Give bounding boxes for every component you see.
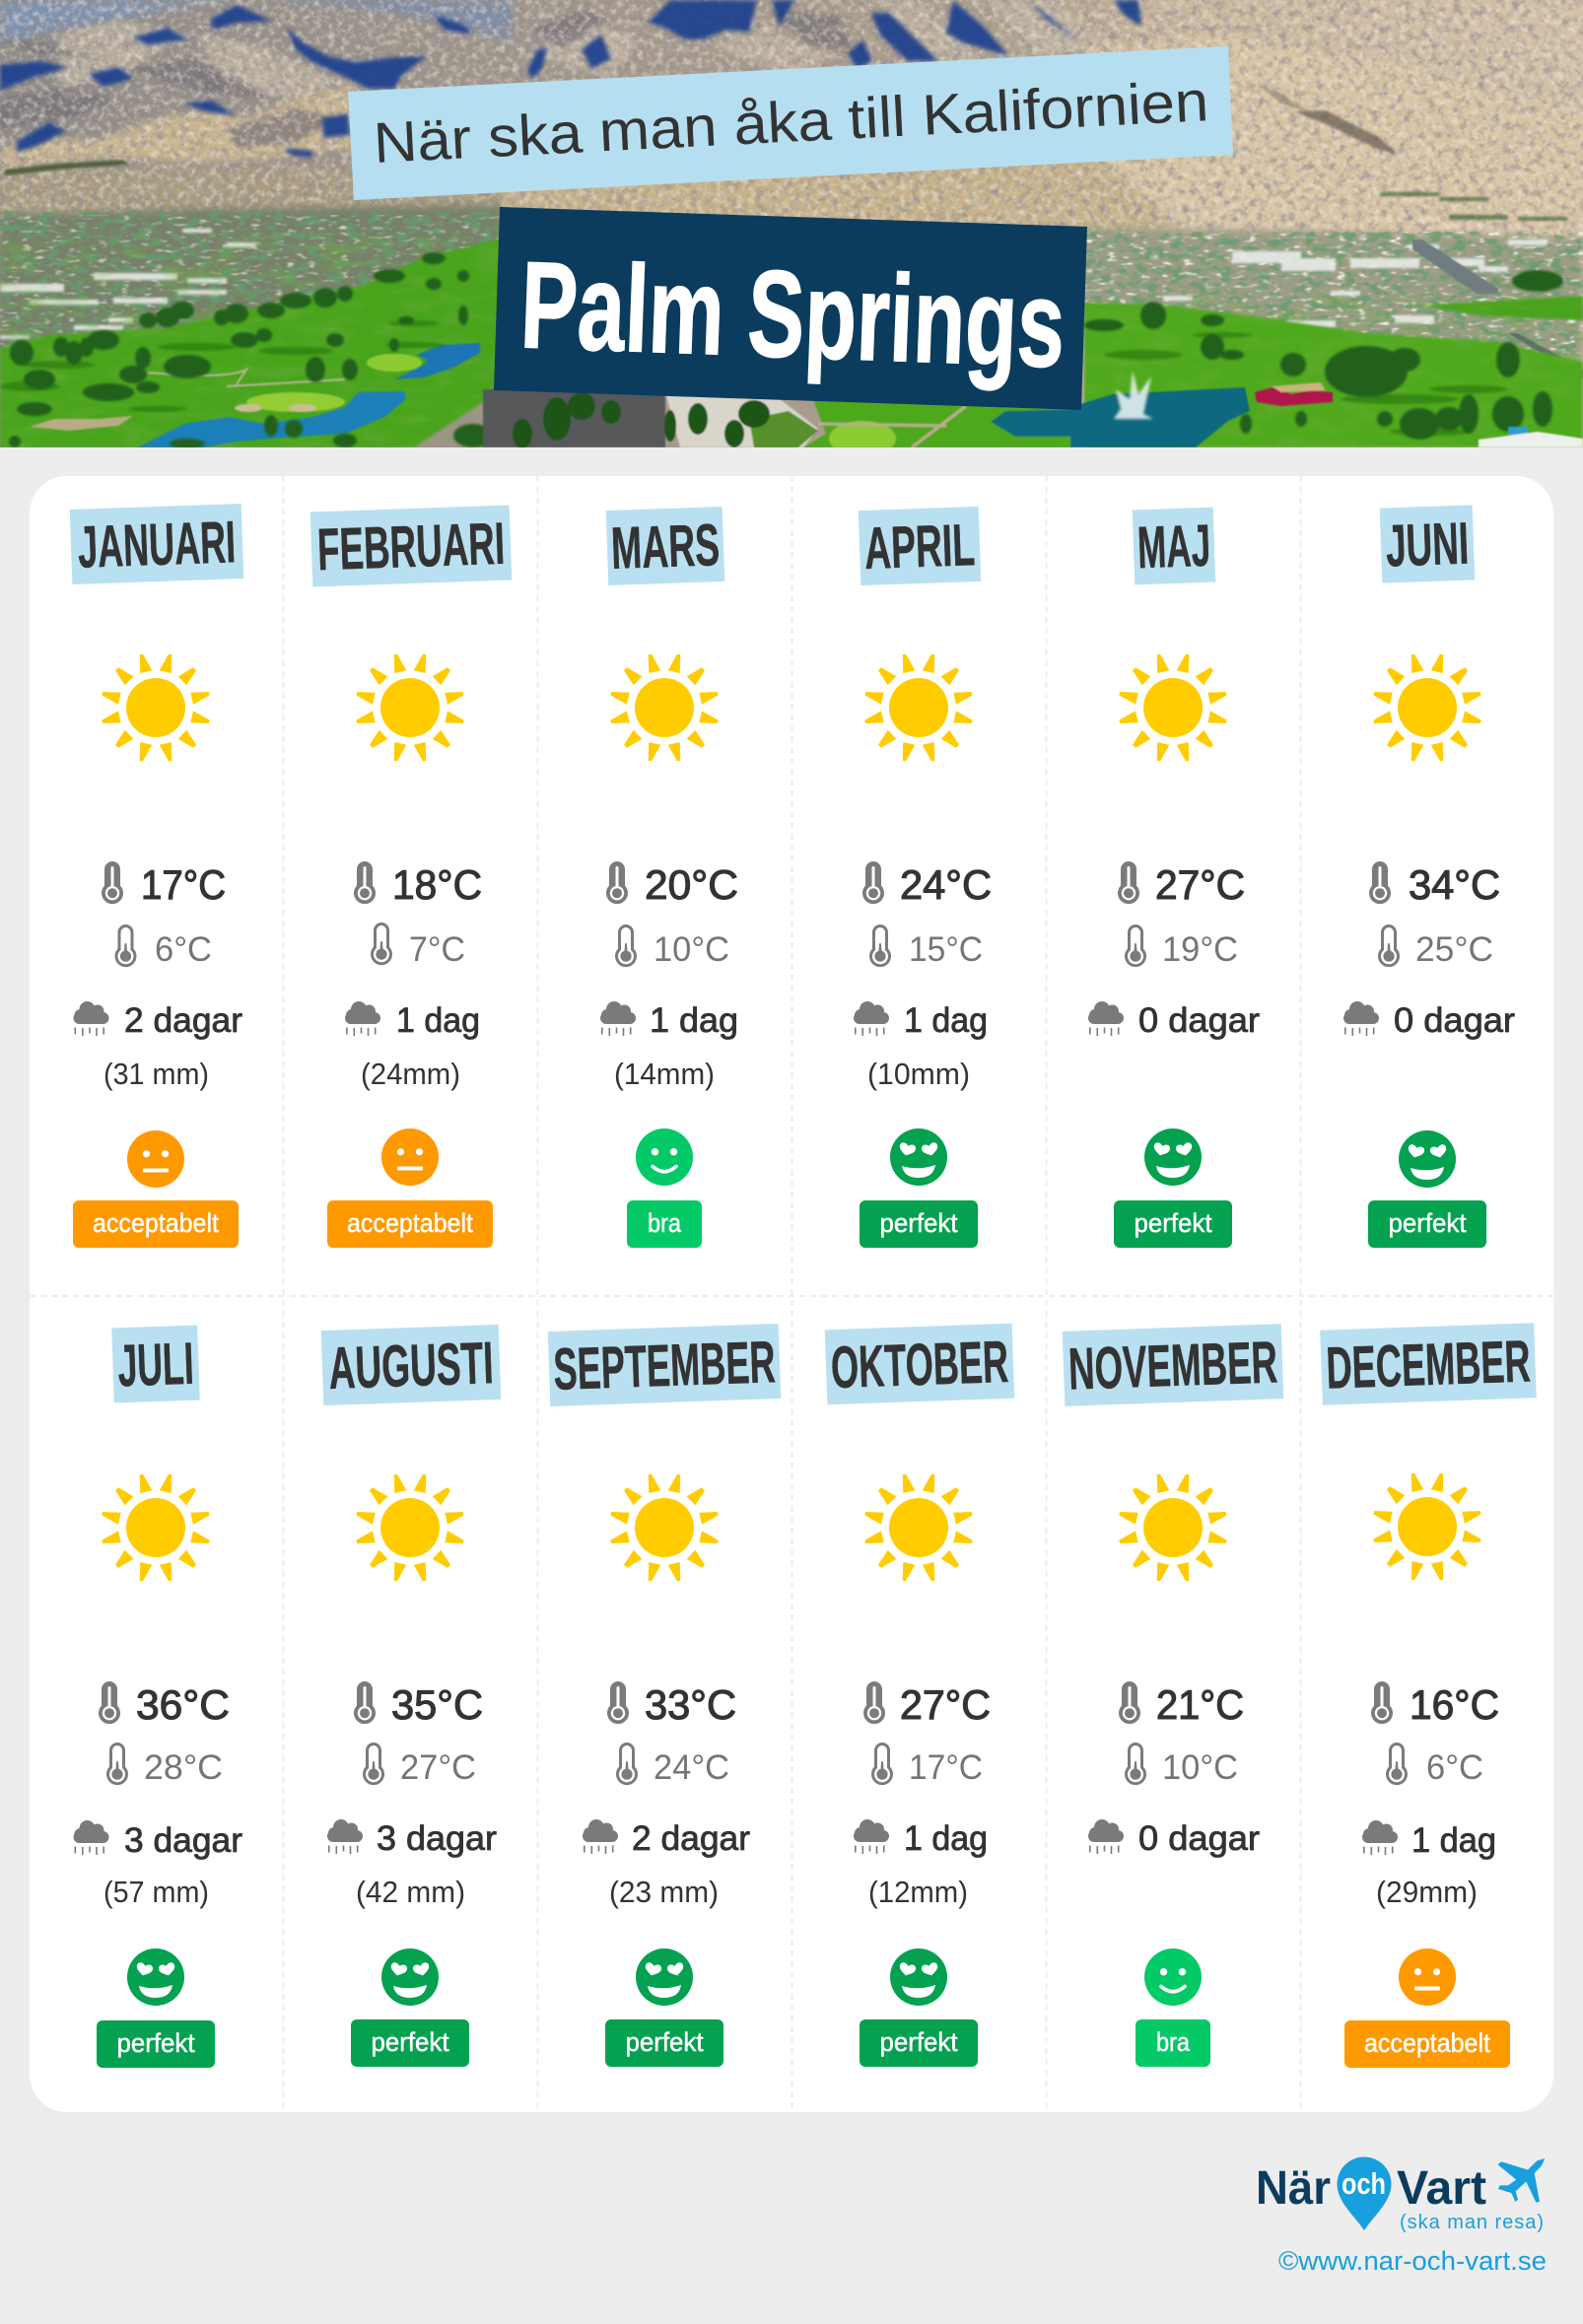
low temperature: 25°C <box>1415 930 1493 969</box>
month label: JUNI <box>1385 511 1470 579</box>
month label: APRIL <box>863 512 976 581</box>
rating pill: perfekt <box>879 2027 958 2057</box>
rainfall: (24mm) <box>361 1057 460 1091</box>
icon: sun <box>1119 654 1227 761</box>
rainfall: (42 mm) <box>356 1875 465 1909</box>
rain days: 3 dagar <box>124 1821 242 1860</box>
month label: SEPTEMBER <box>552 1329 777 1402</box>
low temperature: 10°C <box>654 930 729 969</box>
icon: perfect face <box>1144 1128 1202 1186</box>
icon: sun <box>1119 1474 1227 1581</box>
logo: När och Vart: Vart <box>1397 2162 1486 2215</box>
title banner <box>494 207 1087 410</box>
low temperature <box>871 1743 983 1787</box>
cell: mars <box>600 507 738 1248</box>
low temperature: 27°C <box>400 1748 476 1787</box>
low temperature: 28°C <box>144 1748 223 1787</box>
month label <box>1380 505 1475 583</box>
high temperature: 16°C <box>1410 1681 1499 1728</box>
high temperature: 27°C <box>900 1681 991 1728</box>
rain days <box>1343 1001 1515 1040</box>
rain days <box>583 1819 750 1858</box>
rating pill <box>1344 2020 1510 2068</box>
cell: juli <box>73 1326 242 2068</box>
rain days <box>73 1820 242 1860</box>
low temperature <box>363 1743 476 1787</box>
rainfall: (31 mm) <box>103 1057 209 1091</box>
subtitle banner: När ska man åka till Kalifornien <box>372 69 1210 175</box>
high temperature <box>1119 1681 1244 1728</box>
rating pill <box>73 1200 239 1248</box>
icon: sun <box>356 654 464 761</box>
low temperature: 6°C <box>1426 1748 1483 1787</box>
rain days: 1 dag <box>650 1001 738 1040</box>
rating pill <box>1136 2019 1210 2067</box>
icon: sun <box>356 1474 464 1581</box>
rainfall: (14mm) <box>614 1057 715 1091</box>
rain days <box>600 1001 738 1040</box>
icon: neutral face <box>127 1130 184 1188</box>
high temperature <box>102 861 226 908</box>
month label <box>1133 508 1215 584</box>
rating pill: acceptabelt <box>93 1208 219 1238</box>
icon: perfect face <box>636 1948 693 2006</box>
cell: oktober <box>825 1324 1014 2067</box>
rating pill <box>860 2019 978 2067</box>
month label: NOVEMBER <box>1067 1329 1278 1402</box>
high temperature: 21°C <box>1156 1681 1244 1728</box>
low temperature: 15°C <box>909 930 983 969</box>
low temperature <box>1386 1743 1483 1787</box>
high temperature: 33°C <box>645 1681 736 1728</box>
month label <box>606 507 724 585</box>
icon: airplane <box>1497 2158 1545 2203</box>
title banner: Palm Springs <box>518 237 1067 393</box>
icon: neutral face <box>381 1128 439 1186</box>
cell: augusti <box>321 1325 501 2067</box>
icon: neutral face <box>1399 1948 1456 2006</box>
rating pill: acceptabelt <box>1364 2028 1490 2058</box>
low temperature: 7°C <box>409 930 465 969</box>
rain days <box>1088 1001 1260 1040</box>
rain days: 3 dagar <box>377 1819 497 1858</box>
rating pill: acceptabelt <box>347 1208 473 1238</box>
icon: perfect face <box>890 1128 947 1186</box>
rainfall: (10mm) <box>867 1057 970 1091</box>
icon: sun <box>102 654 210 761</box>
month label <box>825 1324 1014 1404</box>
icon: sun <box>864 1474 973 1581</box>
month label <box>111 1326 200 1402</box>
rating pill: bra <box>648 1208 682 1238</box>
rain days <box>73 1001 242 1040</box>
low temperature <box>1378 924 1493 969</box>
high temperature: 34°C <box>1409 861 1500 908</box>
cell: maj <box>1088 508 1260 1248</box>
icon: sun <box>610 654 719 761</box>
month label: JULI <box>116 1331 195 1399</box>
rain days: 1 dag <box>1411 1821 1496 1860</box>
rating pill <box>327 1200 493 1248</box>
rating pill <box>1114 1200 1232 1248</box>
rainfall: (23 mm) <box>609 1875 719 1909</box>
month label <box>70 504 243 584</box>
rain days: 0 dagar <box>1394 1001 1515 1040</box>
icon: sun <box>1373 654 1481 761</box>
rating pill: perfekt <box>1134 1208 1212 1238</box>
rain days <box>345 1001 480 1040</box>
high temperature <box>354 861 482 908</box>
rating pill <box>605 2019 723 2067</box>
high temperature <box>1118 861 1245 908</box>
low temperature <box>371 923 465 969</box>
rain days <box>327 1819 497 1858</box>
icon: sun <box>864 654 973 761</box>
month label: FEBRUARI <box>316 511 506 582</box>
rating pill: perfekt <box>371 2027 449 2057</box>
cell: juni <box>1343 505 1515 1248</box>
icon: perfect face <box>127 1948 184 2006</box>
low temperature: 24°C <box>654 1748 729 1787</box>
low temperature <box>615 924 729 969</box>
low temperature: 17°C <box>909 1748 983 1787</box>
low temperature: 6°C <box>155 930 212 969</box>
high temperature: 24°C <box>900 861 992 908</box>
rainfall: (29mm) <box>1376 1875 1478 1909</box>
rating pill <box>351 2019 469 2067</box>
panel: monthly climate table <box>30 476 1553 2112</box>
low temperature <box>616 1743 729 1787</box>
rain days <box>854 1001 988 1040</box>
cell: februari <box>310 505 512 1248</box>
rating pill: perfekt <box>116 2028 195 2058</box>
month label <box>321 1325 501 1405</box>
icon: sun <box>102 1474 210 1581</box>
icon: good face <box>636 1128 693 1186</box>
rain days <box>1088 1819 1260 1858</box>
low temperature <box>1125 924 1238 969</box>
icon: good face <box>1144 1948 1202 2006</box>
cell: september <box>548 1324 781 2067</box>
rating pill: perfekt <box>879 1208 958 1238</box>
rain days: 1 dag <box>904 1819 988 1858</box>
low temperature: 19°C <box>1162 930 1238 969</box>
low temperature <box>869 924 983 969</box>
cell: november <box>1063 1324 1283 2067</box>
rating pill <box>627 1200 702 1248</box>
low temperature: 10°C <box>1162 1748 1238 1787</box>
month label: JANUARI <box>77 509 237 581</box>
rating pill <box>97 2020 215 2068</box>
icon: perfect face <box>890 1948 947 2006</box>
month label <box>548 1324 781 1406</box>
rain days: 1 dag <box>396 1001 480 1040</box>
cell: april <box>854 507 992 1248</box>
month label: OKTOBER <box>830 1329 1009 1401</box>
rainfall: (12mm) <box>868 1875 968 1909</box>
high temperature: 36°C <box>136 1681 230 1728</box>
cell: december <box>1320 1323 1537 2068</box>
rating pill: bra <box>1156 2027 1191 2057</box>
rainfall: (57 mm) <box>103 1875 209 1909</box>
high temperature: 35°C <box>391 1681 483 1728</box>
high temperature <box>1369 861 1500 908</box>
rain days: 1 dag <box>904 1001 988 1040</box>
low temperature <box>106 1743 223 1787</box>
month label <box>1063 1324 1283 1406</box>
logo: När och Vart: (ska man resa) <box>1400 2212 1544 2233</box>
rating pill <box>860 1200 978 1248</box>
rain days <box>1362 1820 1496 1860</box>
high temperature <box>1371 1681 1499 1728</box>
logo: När och Vart: När <box>1256 2162 1331 2215</box>
cell: januari <box>70 504 243 1248</box>
rain days: 2 dagar <box>124 1001 242 1040</box>
icon: sun <box>1373 1473 1481 1580</box>
rain days: 0 dagar <box>1138 1819 1260 1858</box>
icon: perfect face <box>381 1948 439 2006</box>
month label <box>310 505 512 587</box>
website credit: ©www.nar-och-vart.se <box>1278 2246 1547 2276</box>
rain days <box>854 1819 988 1858</box>
rating pill: perfekt <box>1388 1208 1467 1238</box>
header photo: mountains and golf course <box>0 0 1583 456</box>
icon: perfect face <box>1399 1130 1456 1188</box>
low temperature <box>114 924 212 969</box>
rain days: 2 dagar <box>632 1819 750 1858</box>
month label: AUGUSTI <box>327 1330 495 1401</box>
icon: sun <box>610 1474 719 1581</box>
rain days: 0 dagar <box>1138 1001 1260 1040</box>
logo: När och Vart <box>1256 2156 1545 2233</box>
rating pill <box>1368 1200 1486 1248</box>
icon: map pin: och <box>1342 2166 1386 2201</box>
subtitle banner <box>348 46 1233 200</box>
high temperature: 18°C <box>392 861 482 908</box>
high temperature: 27°C <box>1155 861 1245 908</box>
high temperature: 20°C <box>645 861 738 908</box>
high temperature: 17°C <box>141 861 226 908</box>
month label: MARS <box>610 512 721 581</box>
icon: map pin <box>1337 2156 1392 2230</box>
month label <box>859 507 981 585</box>
rating pill: perfekt <box>625 2027 704 2057</box>
low temperature <box>1125 1743 1238 1787</box>
month label: MAJ <box>1136 513 1211 581</box>
